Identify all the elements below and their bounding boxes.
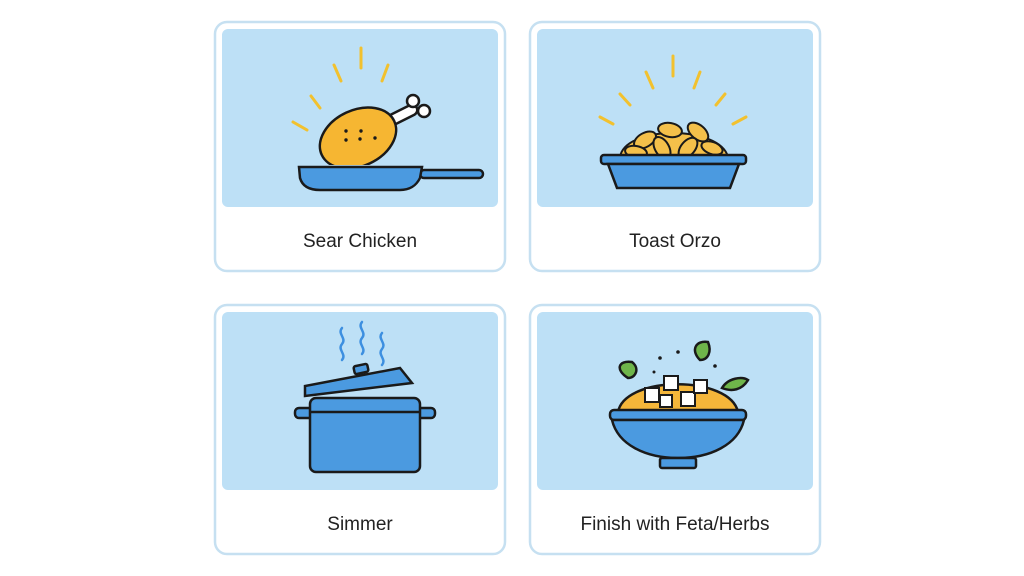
card: simmer bbox=[215, 305, 505, 554]
card: finish with feta/herbs bbox=[530, 305, 820, 554]
label: Finish with Feta/Herbs: Finish with Feta/Herbs bbox=[580, 514, 770, 535]
icon: orzo pile bbox=[620, 119, 728, 162]
icon: salad bowl bbox=[610, 342, 748, 468]
card: toast orzo bbox=[530, 22, 820, 271]
label: Toast Orzo: Toast Orzo bbox=[629, 231, 721, 252]
label: Simmer: Simmer bbox=[327, 514, 393, 535]
icon: steam bbox=[341, 322, 383, 365]
icon: dish bbox=[601, 155, 746, 188]
icon: sizzle lines bbox=[293, 48, 388, 130]
icon: sparkle lines bbox=[600, 56, 746, 124]
icon: pot bbox=[295, 364, 435, 472]
icon: chicken leg bbox=[310, 95, 430, 180]
card: sear chicken bbox=[215, 22, 505, 271]
label: Sear Chicken: Sear Chicken bbox=[303, 231, 417, 252]
icon: frying pan bbox=[299, 167, 483, 190]
